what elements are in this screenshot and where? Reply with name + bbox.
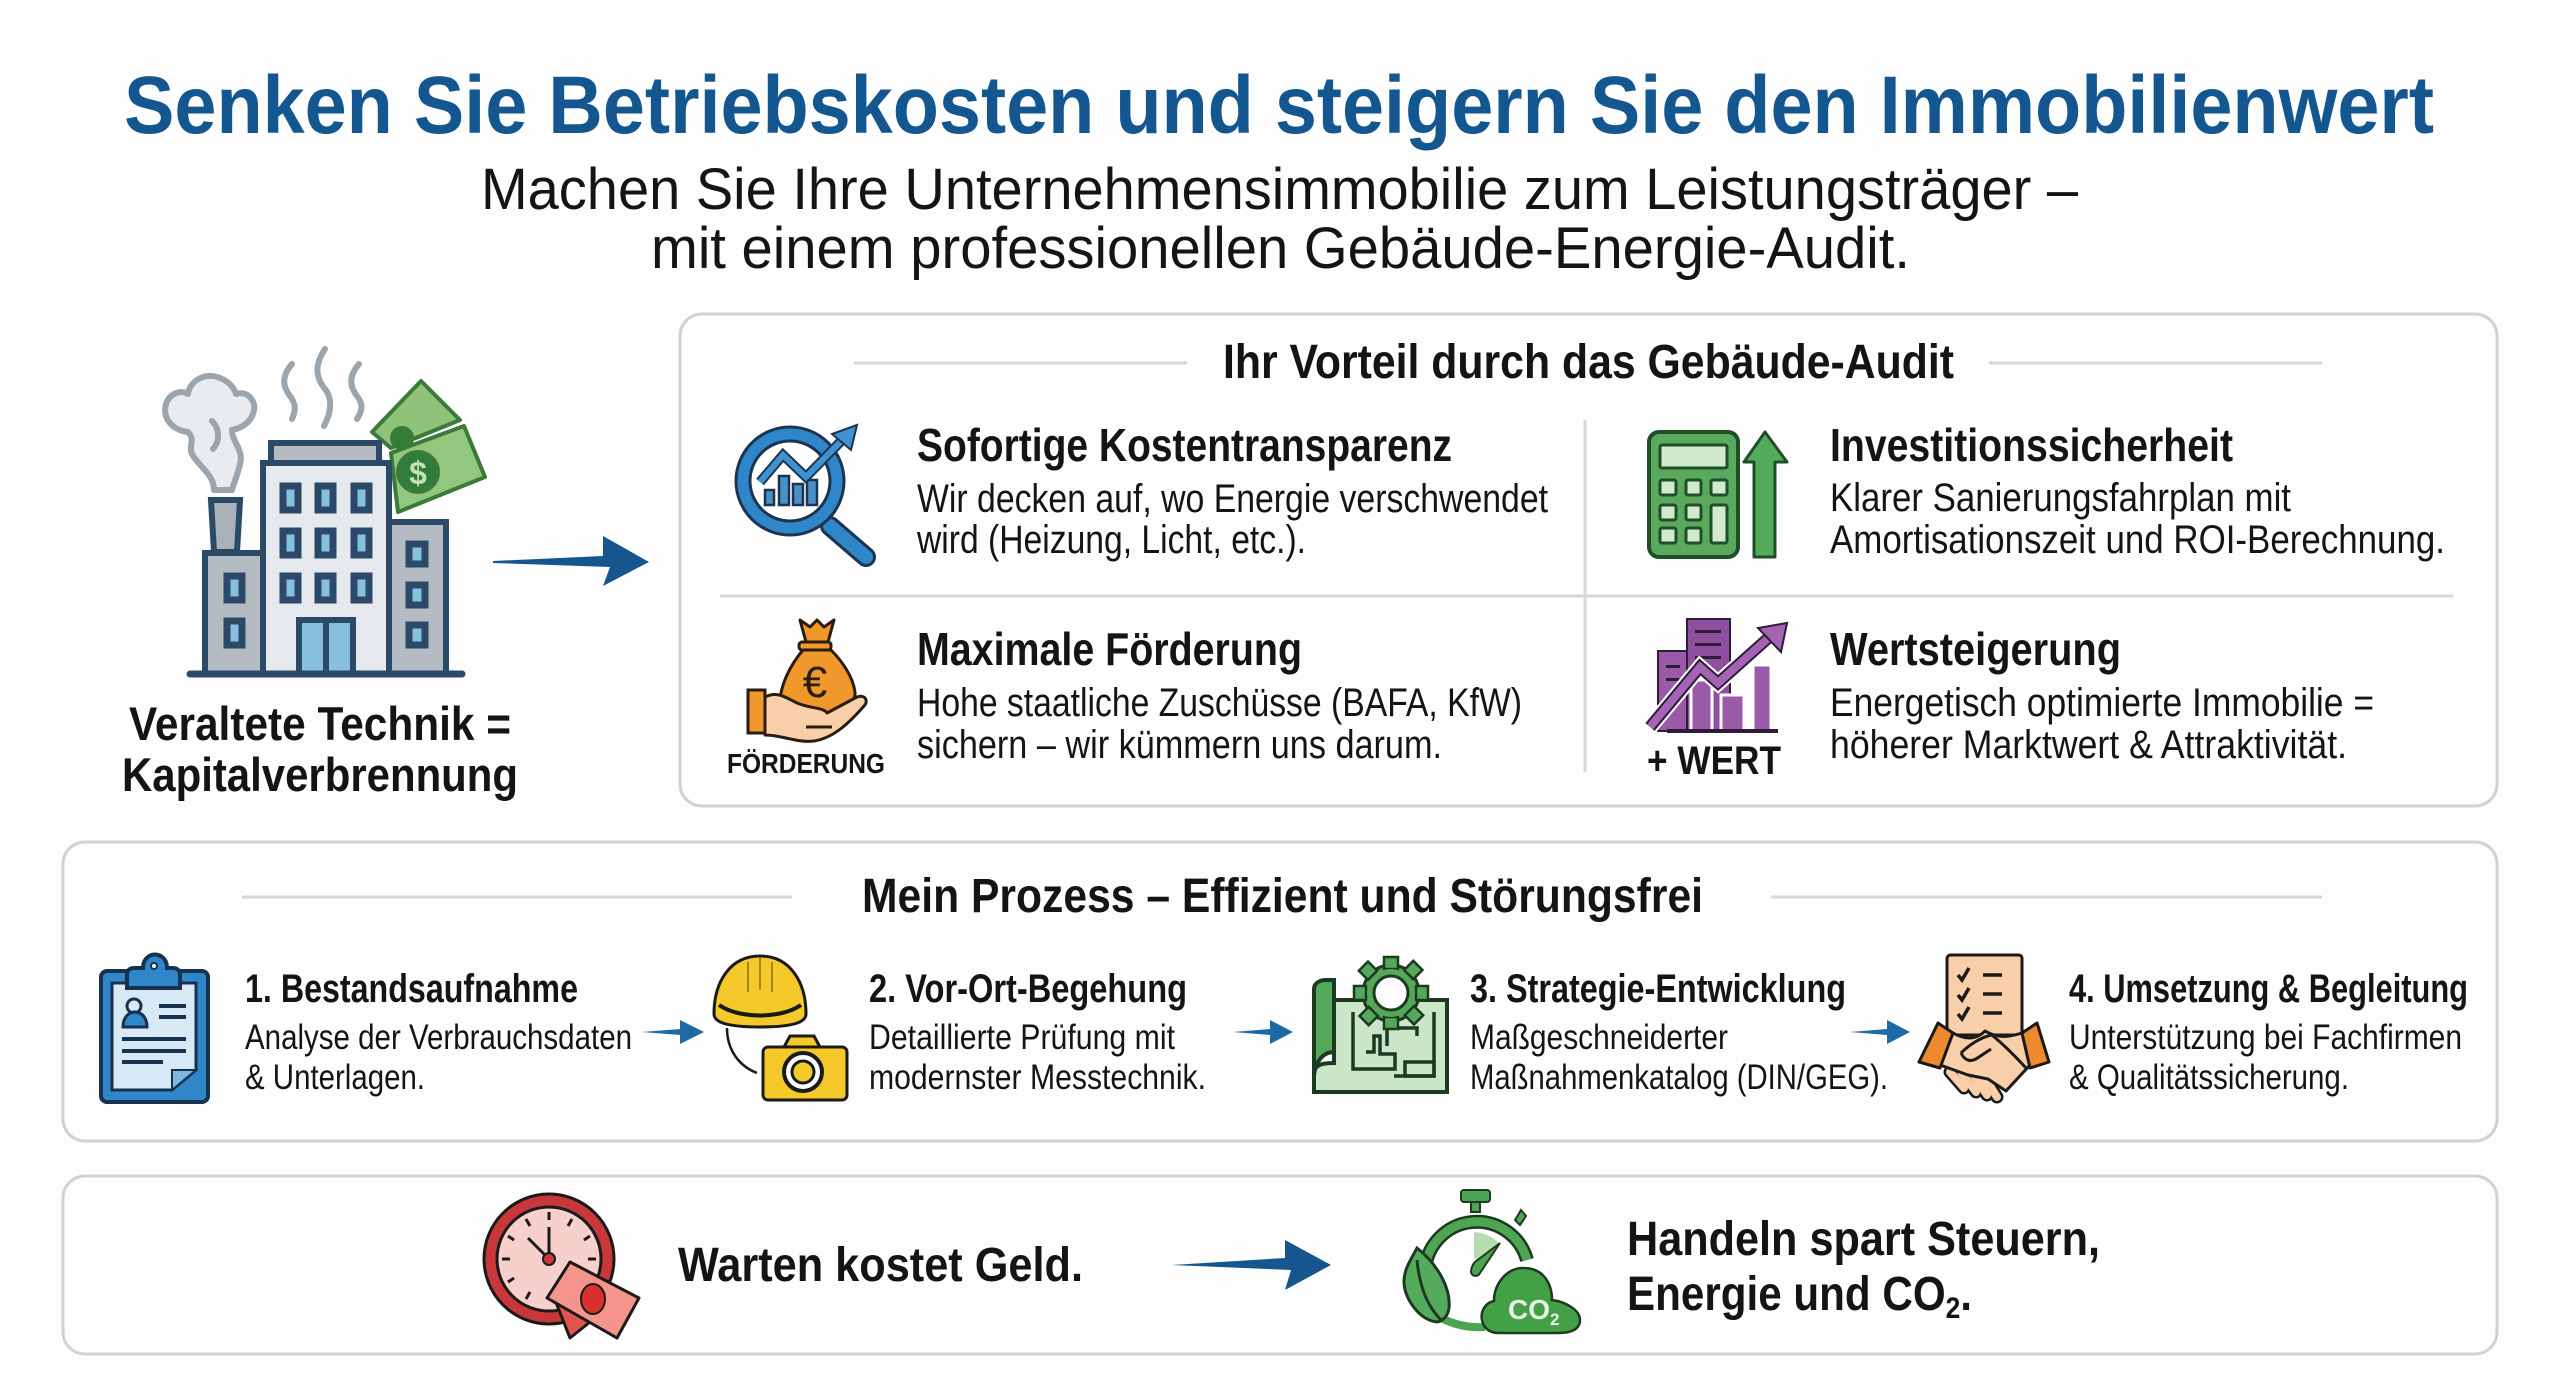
icon: rising value chart with buildings	[1647, 619, 1787, 783]
benefit: Wertsteigerung	[1830, 623, 2374, 767]
step 2 text	[869, 967, 1206, 1097]
benefit: Wertsteigerung: Energetisch optimierte Immobilie =	[1830, 681, 2374, 725]
benefit: Maximale Förderung: Hohe staatliche Zuschüsse (BAFA, KfW)	[917, 681, 1522, 725]
arrow: step 1 to 2	[642, 1020, 704, 1044]
icon: stopwatch with leaf and CO2 cloud: CO	[1508, 1294, 1550, 1325]
panel: process	[63, 842, 2497, 1141]
subtitle: mit einem professionellen Gebäude-Energie-Audit.	[651, 216, 1910, 281]
benefit: Sofortige Kostentransparenz: Sofortige Kostentransparenz	[917, 419, 1452, 471]
step 2 text: Detaillierte Prüfung mit	[869, 1018, 1175, 1057]
benefit: Maximale Förderung	[917, 623, 1522, 767]
text: acting saves	[1627, 1213, 2100, 1325]
icon: helmet and camera	[714, 956, 847, 1100]
icon: money bag in hand: €	[803, 658, 827, 707]
icon label: + WERT	[1647, 739, 1781, 783]
icon: stopwatch with leaf and CO2 cloud	[1404, 1190, 1580, 1333]
step 4 text	[2069, 967, 2468, 1097]
icon: stopwatch with leaf and CO2 cloud: 2	[1550, 1310, 1559, 1329]
benefit: Sofortige Kostentransparenz: Wir decken auf, wo Energie verschwendet	[917, 477, 1548, 521]
icon: magnifier with chart	[743, 425, 866, 557]
benefit: Sofortige Kostentransparenz: wird (Heizung, Licht, etc.).	[916, 518, 1306, 562]
building caption: Veraltete Technik =	[129, 697, 511, 750]
panel: call to action	[63, 1176, 2497, 1354]
subtitle: Machen Sie Ihre Unternehmensimmobilie zum Leistungsträger –	[481, 157, 2079, 222]
step 4 text: & Qualitätssicherung.	[2069, 1058, 2349, 1097]
icon: checklist and handshake	[1919, 955, 2049, 1097]
arrow: step 3 to 4	[1850, 1020, 1910, 1044]
step 3 text: Maßgeschneiderter	[1470, 1018, 1728, 1057]
benefit: Sofortige Kostentransparenz	[916, 419, 1548, 562]
icon: blueprint with gear	[1314, 957, 1447, 1092]
icon: smoke cloud	[165, 376, 254, 490]
text: acting saves: 2	[1946, 1292, 1960, 1325]
icon label: FÖRDERUNG	[727, 748, 885, 779]
benefit: Wertsteigerung: Wertsteigerung	[1830, 623, 2121, 675]
step 1 text: 1. Bestandsaufnahme	[245, 967, 578, 1011]
step 1 text: & Unterlagen.	[245, 1058, 425, 1097]
text: acting saves: Energie und CO	[1627, 1268, 1990, 1321]
benefit: Investitionssicherheit	[1830, 419, 2445, 562]
building caption: Kapitalverbrennung	[122, 748, 518, 801]
subtitle	[481, 157, 2079, 281]
building caption	[122, 697, 518, 801]
arrow: waiting to acting	[1172, 1240, 1331, 1290]
title: Senken Sie Betriebskosten und steigern Sie den Immobilienwert	[124, 60, 2434, 151]
icon: banknotes	[372, 381, 485, 512]
step 2 text: modernster Messtechnik.	[869, 1058, 1206, 1097]
text: waiting costs money: Warten kostet Geld.	[678, 1239, 1083, 1292]
text: acting saves: .	[1960, 1268, 1972, 1321]
process heading: Mein Prozess – Effizient und Störungsfrei	[862, 870, 1703, 923]
step 3 text: 3. Strategie-Entwicklung	[1470, 967, 1846, 1011]
icon: outdated building with smoke and money	[165, 349, 485, 674]
benefit: Investitionssicherheit: Klarer Sanierungsfahrplan mit	[1830, 476, 2291, 520]
step 3 text	[1470, 967, 1888, 1097]
icon: clipboard	[101, 954, 208, 1102]
icon: clock with banknote	[484, 1194, 639, 1338]
benefit: Investitionssicherheit: Amortisationszeit und ROI-Berechnung.	[1830, 518, 2445, 562]
icon: outdated building with smoke and money: $	[409, 455, 427, 491]
step 1 text	[245, 967, 632, 1097]
step 2 text: 2. Vor-Ort-Begehung	[869, 967, 1187, 1011]
arrow: building to benefits	[493, 536, 649, 586]
icon: building	[205, 443, 446, 674]
text: acting saves: Handeln spart Steuern,	[1627, 1213, 2100, 1266]
step 3 text: Maßnahmenkatalog (DIN/GEG).	[1470, 1058, 1888, 1097]
benefit: Investitionssicherheit: Investitionssicherheit	[1830, 419, 2233, 471]
benefit: Maximale Förderung: sichern – wir kümmern uns darum.	[917, 723, 1442, 767]
step 4 text: Unterstützung bei Fachfirmen	[2069, 1018, 2462, 1057]
arrow: step 2 to 3	[1233, 1020, 1293, 1044]
icon: heat waves	[284, 349, 362, 426]
step 1 text: Analyse der Verbrauchsdaten	[245, 1018, 632, 1057]
benefit: Maximale Förderung: Maximale Förderung	[917, 623, 1302, 675]
panel: benefits	[680, 314, 2497, 806]
benefits heading: Ihr Vorteil durch das Gebäude-Audit	[1223, 336, 1954, 389]
icon: money bag in hand	[727, 620, 885, 779]
icon: calculator with up arrow	[1649, 432, 1787, 557]
benefit: Wertsteigerung: höherer Marktwert & Attraktivität.	[1830, 723, 2347, 767]
